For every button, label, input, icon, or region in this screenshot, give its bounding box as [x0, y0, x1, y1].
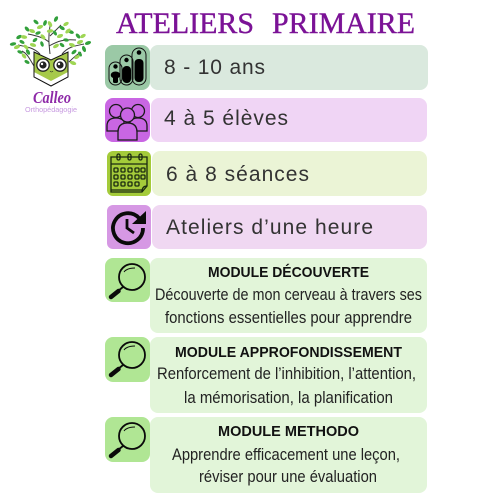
logo tree branches: [18, 25, 84, 66]
logo wordmark: Calleo: [33, 88, 71, 107]
icon: group of pupils: [105, 98, 150, 142]
icon: magnifier: [105, 337, 150, 382]
icon: clock with arrow: [107, 205, 151, 249]
title: PRIMAIRE: [272, 7, 415, 40]
text: sessions: 6 à 8 séances: [166, 163, 309, 186]
panel: module découverte: [105, 258, 427, 333]
heading: MODULE DÉCOUVERTE: [208, 264, 369, 281]
text: age: 8 - 10 ans: [164, 56, 265, 79]
icon: magnifier: [105, 417, 150, 462]
text block: [172, 446, 400, 486]
heading: MODULE APPROFONDISSEMENT: [175, 344, 402, 361]
logo light leaves: [13, 20, 86, 66]
text block: Apprendre efficacement une leçon,: [172, 446, 400, 464]
text: pupils: 4 à 5 élèves: [164, 107, 288, 130]
text block: Renforcement de l’inhibition, l’attention,: [157, 365, 416, 383]
panel: sessions: [107, 151, 427, 196]
panel: pupils: [105, 98, 427, 142]
logo subtitle: Orthopédagogie: [25, 105, 77, 114]
title: [116, 7, 415, 40]
icon: magnifier: [105, 258, 150, 302]
text block: [157, 365, 416, 407]
panel: module methodo: [105, 417, 427, 493]
heading: MODULE METHODO: [218, 423, 359, 440]
panel: duration: [107, 205, 427, 249]
icon: children by height: [105, 45, 150, 90]
logo leaves: [10, 16, 92, 65]
text block: [155, 286, 422, 327]
panel: module approfondissement: [105, 337, 427, 413]
logo: Calleo: [10, 16, 92, 114]
icon: calendar: [107, 151, 151, 196]
panel: age: [105, 45, 428, 90]
text block: réviser pour une évaluation: [199, 468, 377, 486]
title: ATELIERS: [116, 7, 254, 40]
text: duration: Ateliers d’une heure: [166, 216, 373, 239]
logo book: [34, 52, 68, 86]
text block: fonctions essentielles pour apprendre: [165, 309, 412, 327]
text block: Découverte de mon cerveau à travers ses: [155, 286, 422, 304]
text block: la mémorisation, la planification: [184, 389, 393, 407]
